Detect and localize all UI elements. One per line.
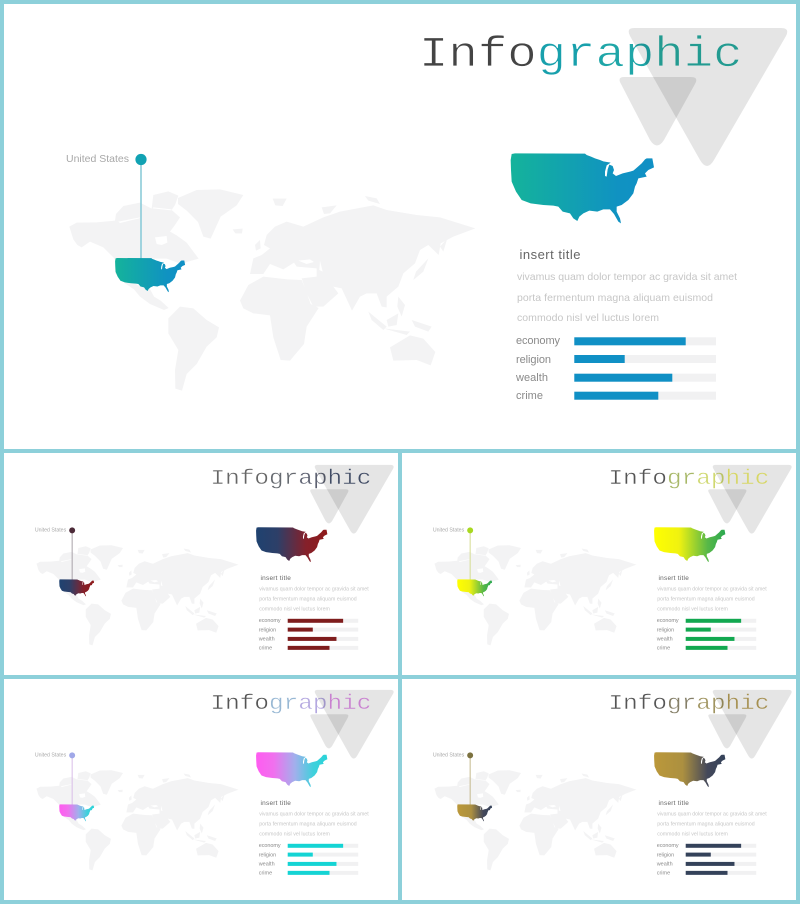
text block: vivamus quam dolor tempor ac gravida sit amet xyxy=(259,586,369,592)
pin label: United States xyxy=(433,528,465,534)
text block xyxy=(259,575,369,613)
pin label: United States xyxy=(433,753,465,759)
text block: vivamus quam dolor tempor ac gravida sit amet xyxy=(657,586,767,592)
bar chart: wealth xyxy=(258,637,275,643)
world map xyxy=(36,545,238,645)
pin label: United States xyxy=(66,153,129,165)
text block: insert title xyxy=(260,575,291,582)
bar chart: economy xyxy=(657,618,679,624)
panel: pink-cyan variant xyxy=(2,677,400,902)
title: Infographic xyxy=(419,31,743,79)
bar chart: wealth xyxy=(515,372,548,384)
world map xyxy=(434,770,636,870)
map pin line xyxy=(469,756,471,805)
text block xyxy=(259,800,369,838)
map pin dot xyxy=(467,752,473,758)
text block: vivamus quam dolor tempor ac gravida sit amet xyxy=(259,811,369,817)
map pin line xyxy=(71,756,73,805)
bar chart: religion xyxy=(516,354,551,366)
world map xyxy=(36,770,238,870)
text block: vivamus quam dolor tempor ac gravida sit amet xyxy=(657,811,767,817)
text block: commodo nisl vel luctus lorem xyxy=(657,832,728,838)
text block: insert title xyxy=(658,575,689,582)
text block xyxy=(657,800,767,838)
map pin dot xyxy=(135,154,147,165)
map pin dot xyxy=(69,752,75,758)
text block xyxy=(657,575,767,613)
decorative triangles xyxy=(708,465,792,534)
text block xyxy=(517,247,737,324)
highlighted USA on map xyxy=(115,258,185,292)
map pin line xyxy=(71,531,73,580)
highlighted USA on map xyxy=(59,579,94,596)
map pin dot xyxy=(467,527,473,533)
bar chart: religion xyxy=(259,853,276,859)
bar chart: religion xyxy=(657,628,674,634)
bar chart: economy xyxy=(657,843,679,849)
bar chart: crime xyxy=(657,646,670,652)
bar chart: crime xyxy=(259,871,272,877)
text block: porta fermentum magna aliquam euismod xyxy=(657,822,755,828)
pin label: United States xyxy=(35,753,67,759)
text block: commodo nisl vel luctus lorem xyxy=(517,312,659,324)
highlighted USA on map xyxy=(59,804,94,821)
panel: gold-slate variant xyxy=(400,677,798,902)
decorative triangles xyxy=(310,690,394,759)
bar chart: crime xyxy=(259,646,272,652)
bar chart xyxy=(258,843,358,877)
decorative triangles xyxy=(310,465,394,534)
title: Infographic xyxy=(608,466,769,490)
large USA map xyxy=(654,752,725,787)
title: Infographic xyxy=(210,466,371,490)
pin label: United States xyxy=(35,528,67,534)
text block: commodo nisl vel luctus lorem xyxy=(657,607,728,613)
highlighted USA on map xyxy=(457,579,492,596)
bar chart: economy xyxy=(516,335,560,347)
text block: insert title xyxy=(260,800,291,807)
text block: insert title xyxy=(658,800,689,807)
bar chart xyxy=(656,618,756,652)
text block: porta fermentum magna aliquam euismod xyxy=(517,292,713,304)
large USA map xyxy=(511,153,654,223)
map pin dot xyxy=(69,527,75,533)
world map xyxy=(434,545,636,645)
bar chart: economy xyxy=(259,843,281,849)
bar chart: crime xyxy=(516,390,543,402)
bar chart xyxy=(258,618,358,652)
bar chart: wealth xyxy=(656,862,673,868)
bar chart: wealth xyxy=(656,637,673,643)
large USA map xyxy=(256,527,327,562)
highlighted USA on map xyxy=(457,804,492,821)
decorative triangles xyxy=(620,28,787,166)
bar chart: religion xyxy=(657,853,674,859)
bar chart: economy xyxy=(259,618,281,624)
text block: porta fermentum magna aliquam euismod xyxy=(259,597,357,603)
panel: dark red variant xyxy=(2,451,400,677)
text block: porta fermentum magna aliquam euismod xyxy=(657,597,755,603)
title: Infographic xyxy=(608,691,769,715)
panel: main teal infographic xyxy=(2,2,798,451)
large USA map xyxy=(654,527,725,562)
map pin line xyxy=(140,160,142,260)
bar chart xyxy=(656,843,756,877)
panel: yellow-green variant xyxy=(400,451,798,677)
bar chart: crime xyxy=(657,871,670,877)
text block: porta fermentum magna aliquam euismod xyxy=(259,822,357,828)
map pin line xyxy=(469,531,471,580)
text block: insert title xyxy=(520,247,580,262)
world map xyxy=(69,189,475,391)
title: Infographic xyxy=(210,691,371,715)
bar chart xyxy=(515,335,716,402)
text block: commodo nisl vel luctus lorem xyxy=(259,832,330,838)
bar chart: religion xyxy=(259,628,276,634)
bar chart: wealth xyxy=(258,862,275,868)
decorative triangles xyxy=(708,690,792,759)
text block: vivamus quam dolor tempor ac gravida sit amet xyxy=(517,271,737,283)
text block: commodo nisl vel luctus lorem xyxy=(259,607,330,613)
large USA map xyxy=(256,752,327,787)
